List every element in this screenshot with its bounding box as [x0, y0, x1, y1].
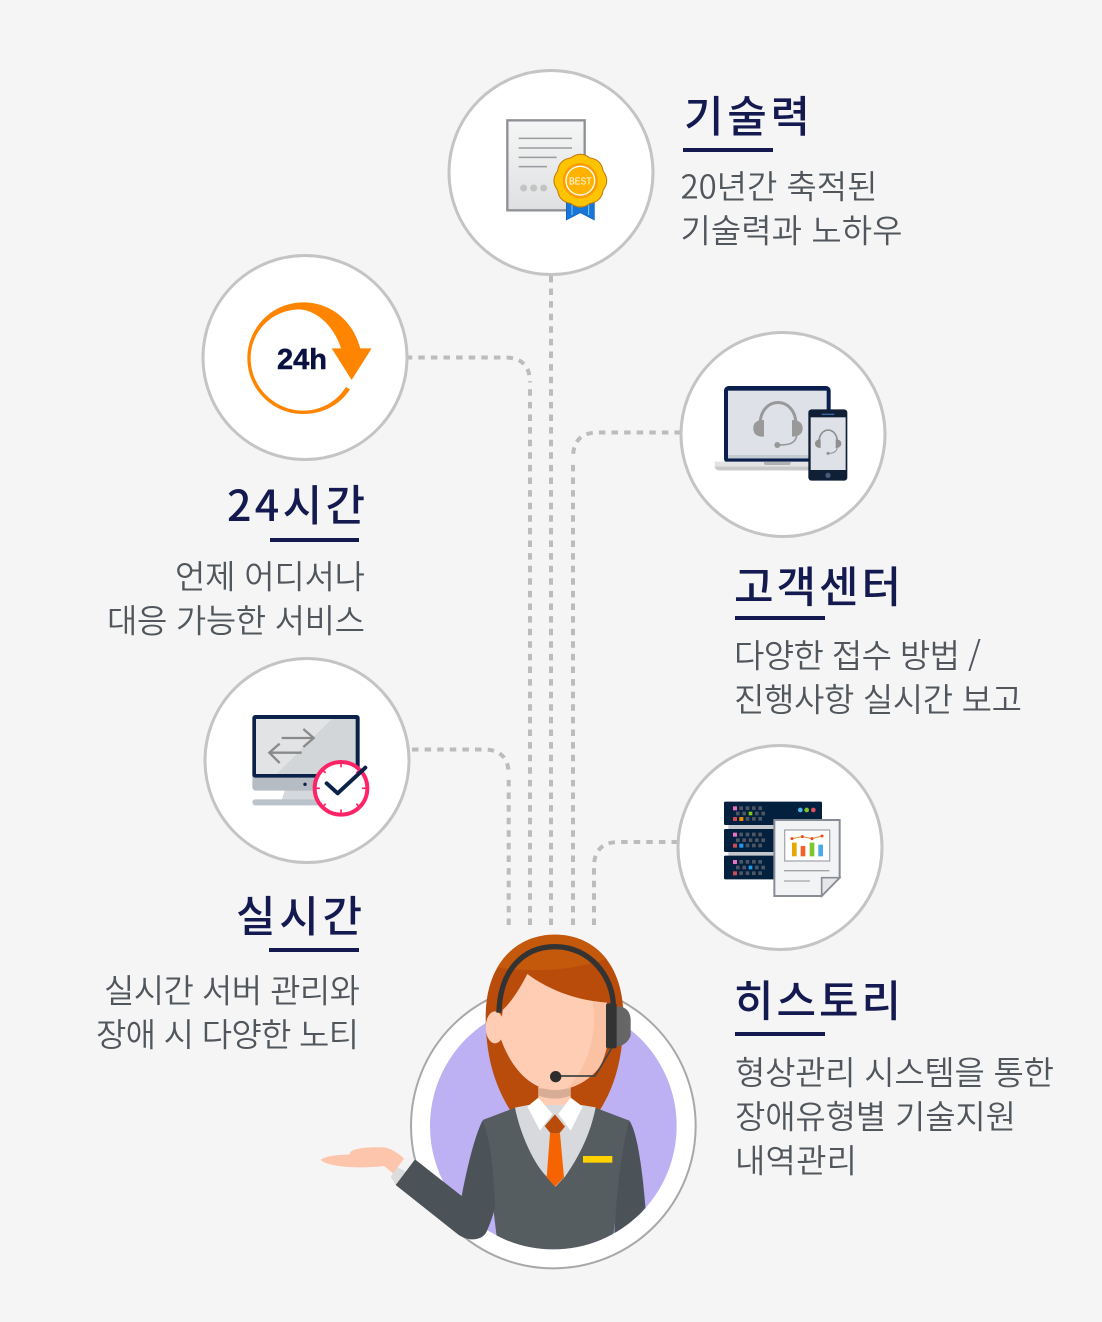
headset	[499, 947, 631, 1082]
panel: 기술력	[449, 70, 902, 274]
text: 히스토리 description: 내역관리	[735, 1134, 857, 1182]
icon: laptop and phone with headset	[681, 332, 885, 536]
icon: servers and report document	[678, 746, 882, 950]
text: 실시간 description	[96, 964, 360, 1056]
hand	[321, 1147, 415, 1185]
panel: 24시간	[107, 256, 407, 642]
dotted connector lines	[406, 276, 681, 925]
heading: 고객센터: 고객센터	[734, 554, 901, 616]
text: 히스토리 description: 장애유형별 기술지원	[735, 1090, 1016, 1138]
heading: 히스토리: 히스토리	[734, 968, 901, 1030]
text: 24시간 description: 언제 어디서나	[175, 550, 365, 598]
heading: 기술력: 기술력	[684, 83, 810, 145]
panel: 고객센터	[681, 332, 1022, 722]
icon: certificate with best badge: BEST	[569, 177, 592, 188]
icon: certificate with best badge	[449, 70, 653, 274]
text: 기술력 description	[680, 160, 902, 252]
panel: 히스토리	[678, 746, 1054, 1182]
neck	[538, 1087, 571, 1115]
icon: 24h circular arrow	[203, 256, 407, 460]
sleeve arm	[396, 1121, 495, 1239]
collar and tie	[527, 1098, 612, 1187]
text: 히스토리 description	[735, 1046, 1054, 1182]
text: 24시간 description	[107, 550, 365, 642]
text: 기술력 description: 20년간 축적된	[680, 160, 878, 208]
heading: 24시간: 24시간	[227, 472, 365, 534]
face	[486, 974, 609, 1090]
text: 실시간 description: 장애 시 다양한 노티	[96, 1008, 359, 1056]
text: 고객센터 description	[734, 630, 1022, 722]
text: 고객센터 description: 다양한 접수 방법 /	[734, 630, 981, 678]
uniform body	[483, 1105, 653, 1253]
heading: 실시간: 실시간	[236, 883, 362, 945]
panel: 실시간	[96, 658, 409, 1056]
icon: monitor with clock check	[205, 658, 409, 862]
text: 실시간 description: 실시간 서버 관리와	[104, 964, 360, 1012]
text: 기술력 description: 기술력과 노하우	[680, 204, 902, 252]
text: 히스토리 description: 형상관리 시스템을 통한	[735, 1046, 1054, 1094]
illustration: call center agent	[321, 927, 696, 1268]
backdrop circle	[411, 984, 696, 1268]
text: 24시간 description: 대응 가능한 서비스	[107, 594, 365, 642]
hair	[486, 927, 623, 1110]
text: 고객센터 description: 진행사항 실시간 보고	[734, 674, 1022, 722]
icon: 24h circular arrow: 24h	[277, 344, 327, 376]
